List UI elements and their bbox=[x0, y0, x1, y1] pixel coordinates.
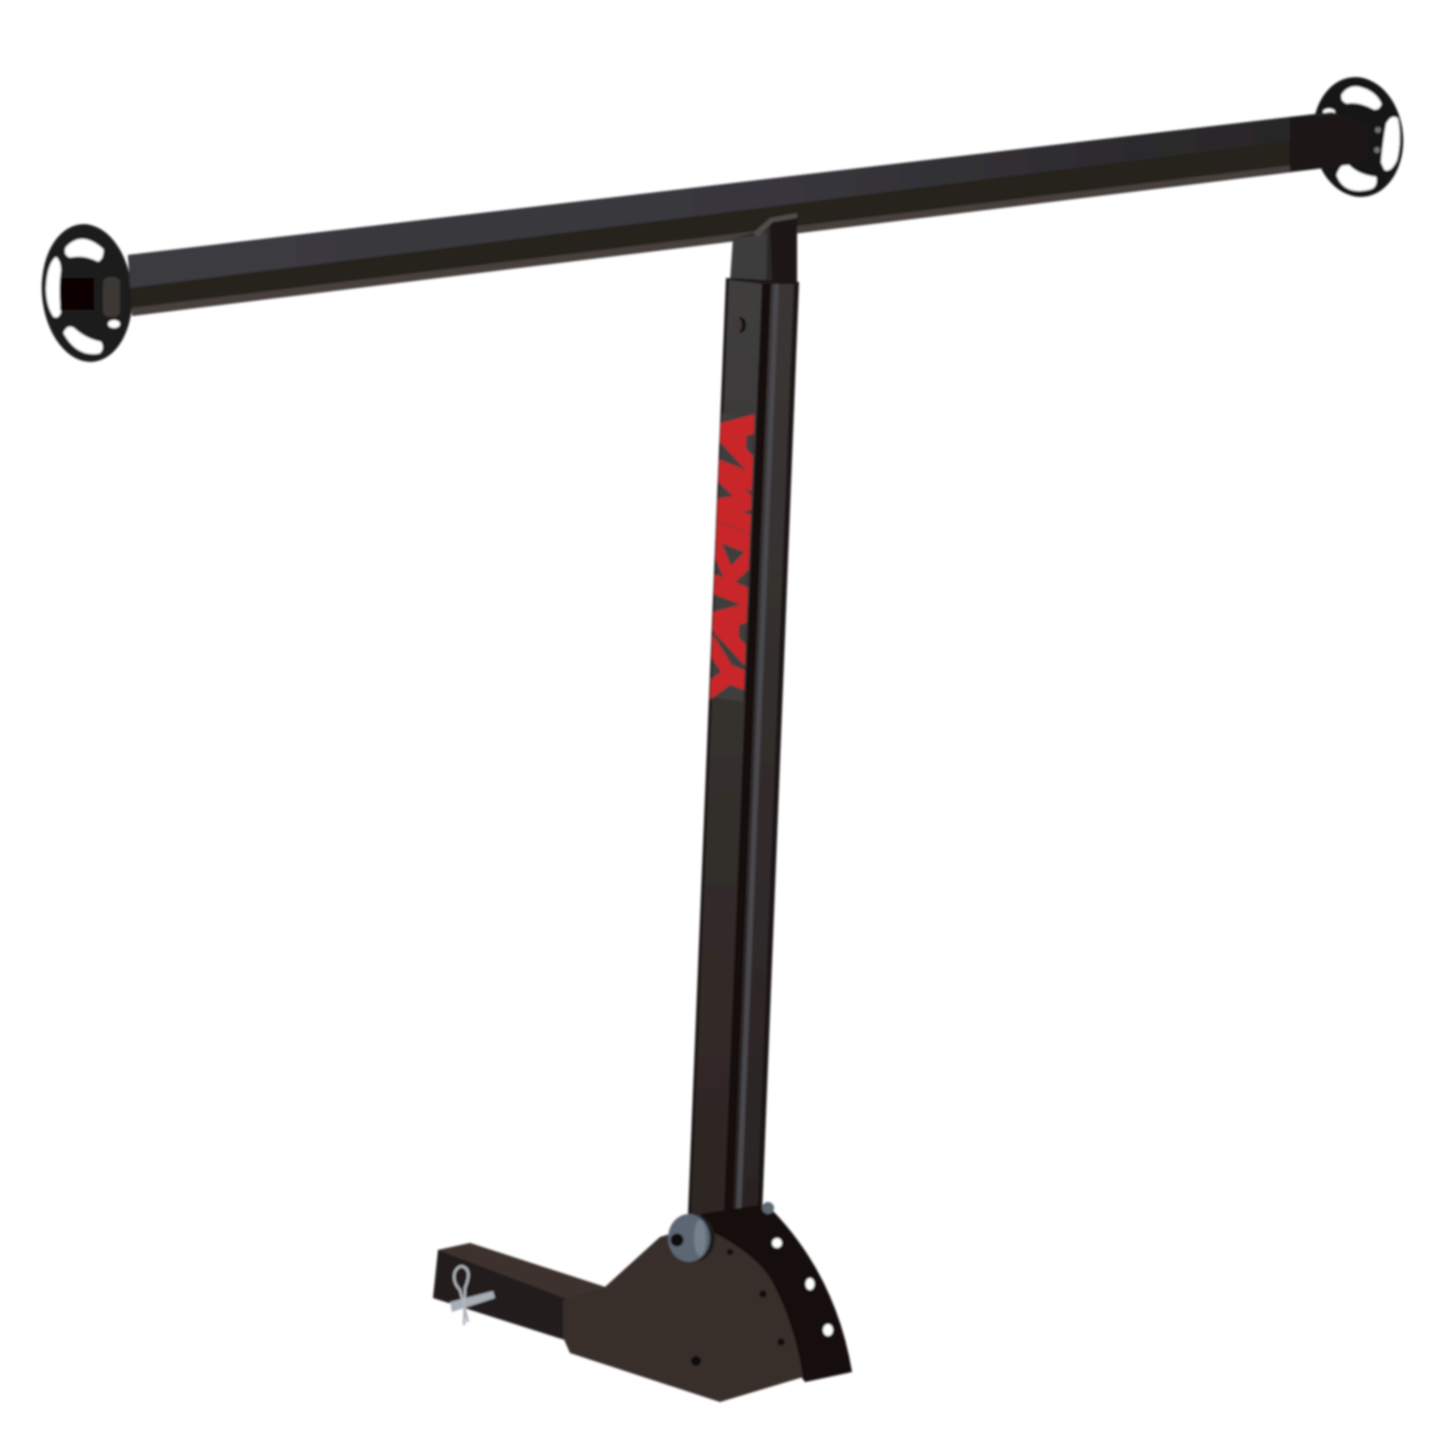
post front face bbox=[691, 280, 763, 1215]
crossbar bbox=[128, 112, 1370, 316]
adjustment knob bbox=[668, 1214, 715, 1262]
post shadow channel bbox=[724, 284, 771, 1215]
post right face bbox=[733, 284, 794, 1215]
base plate bbox=[563, 1225, 803, 1402]
adjuster hole bbox=[732, 317, 746, 333]
hitch pin and clip bbox=[450, 1266, 495, 1325]
lower post body bbox=[688, 278, 799, 1215]
YAKIMA logo: YAKIMA bbox=[704, 413, 761, 700]
post highlight stripe bbox=[736, 284, 779, 1215]
right end wheel bbox=[1307, 73, 1409, 201]
outer curved bracket bbox=[700, 1202, 852, 1382]
left end wheel bbox=[36, 220, 138, 366]
hitch tube bbox=[433, 1243, 605, 1340]
telescoping neck bbox=[730, 213, 797, 282]
YAKIMA logo bbox=[704, 413, 761, 702]
upright post bbox=[688, 213, 799, 1215]
